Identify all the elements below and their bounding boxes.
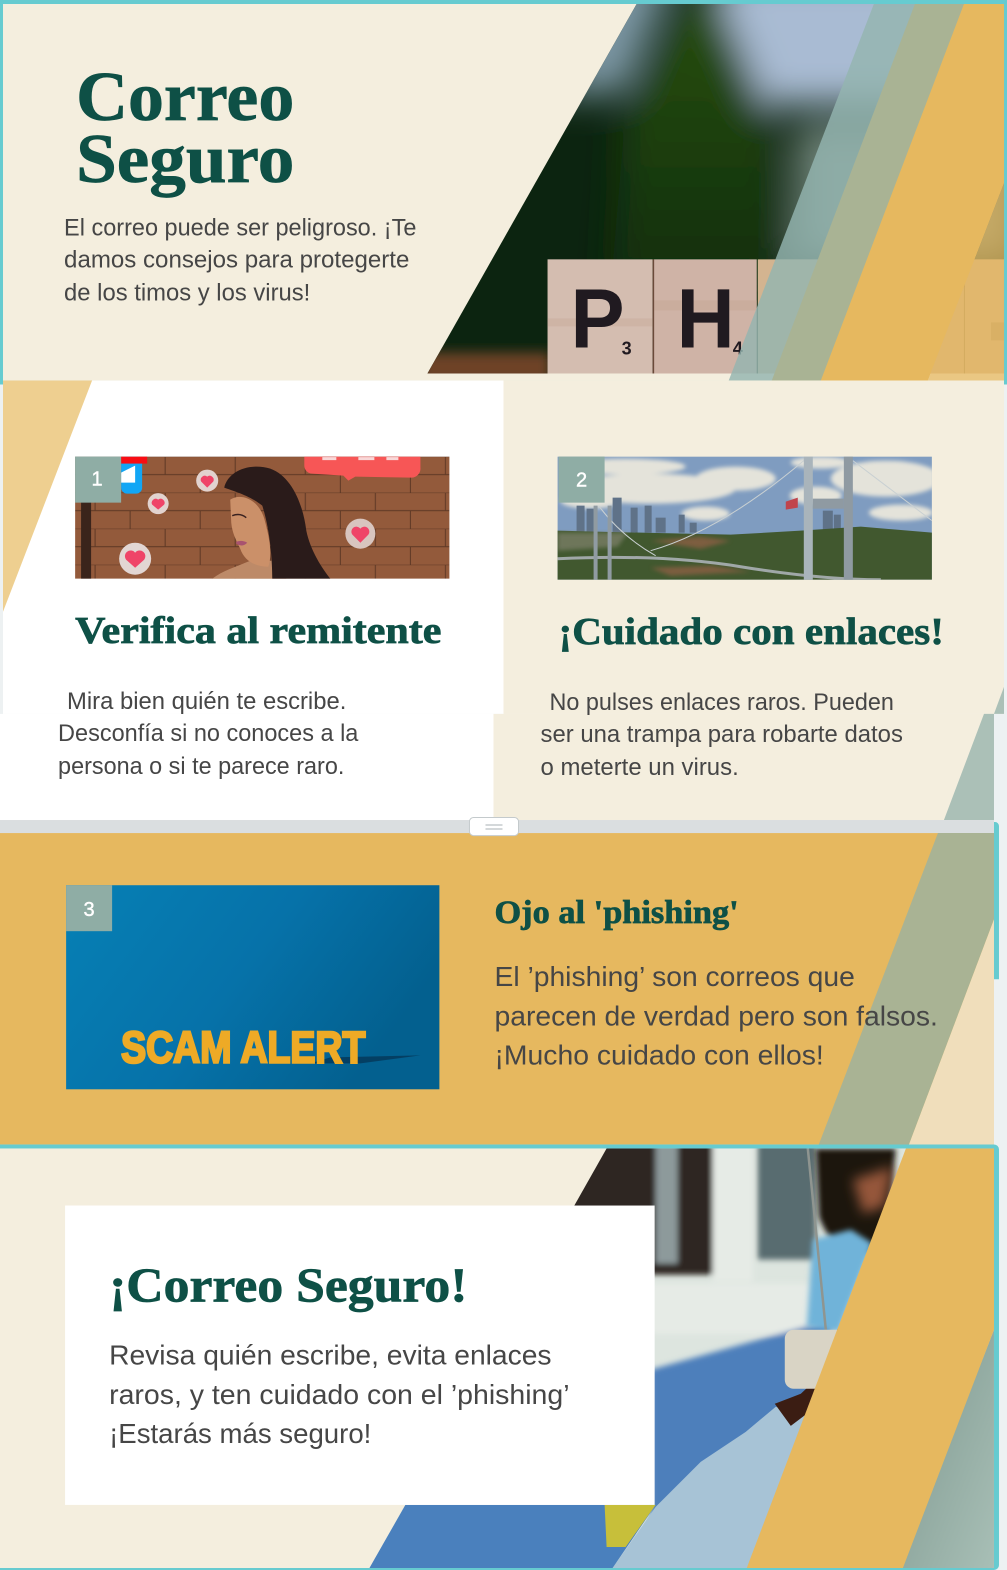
resize bar [0,820,994,833]
photo: woman on train [360,1131,1001,1569]
intro text: damos consejos para protegerte [64,246,409,273]
panel: tip 3 phishing [0,833,994,1144]
panel: header [0,0,1007,384]
body text [541,689,903,781]
body text: raros, y ten cuidado con el ’phishing’ [109,1379,570,1410]
number badge 2: 2 [576,470,587,492]
tile P: 3 [622,338,632,358]
teal side accent [994,822,999,979]
number badge 1 [75,457,121,503]
white text card [65,1206,655,1505]
body text: Desconfía si no conoces a la [58,720,359,747]
photo: scam alert [66,885,439,1089]
diagonal pale triangle [909,919,994,1144]
corner accent [944,687,1004,820]
heading: ¡Cuidado con enlaces! [559,611,944,653]
intro text [64,214,416,306]
body text [109,1340,570,1449]
body text: persona o si te parece raro. [58,753,344,780]
diagonal band: olive [772,4,965,380]
tile H: 4 [733,338,743,358]
number badge 2 [559,457,605,503]
heading: Verifica al remitente [75,610,441,652]
title: Correo [76,59,294,136]
number badge 1: 1 [92,469,103,491]
body text: No pulses enlaces raros. Pueden [550,689,894,716]
panel: conclusion [0,1131,1001,1570]
heading: ¡Correo Seguro! [109,1258,467,1313]
panel: tip 2 cuidado con enlaces [493,380,1004,820]
diagonal band: teal [729,4,916,380]
body text: El ’phishing’ son correos que [494,961,855,992]
diagonal band: gold [821,4,1004,380]
tile P: P [571,271,625,365]
diagonal gold band [747,1148,994,1568]
body text: o meterte un virus. [541,754,739,781]
photo: scam alert: SCAM ALERT [121,1023,365,1072]
body text [58,688,359,780]
body text [494,961,938,1070]
diagonal olive band [819,833,994,1144]
table edge [428,344,548,374]
intro text: El correo puede ser peligroso. ¡Te [64,214,416,241]
panel: tip 1 verifica al remitente [0,380,504,820]
heading: Ojo al 'phishing' [494,895,739,931]
number badge 3: 3 [84,899,95,921]
tile H: H [677,271,735,365]
body text: ¡Estarás más seguro! [109,1418,371,1449]
diagonal overlay: right gold tint [928,183,1004,380]
body text: Mira bien quién te escribe. [67,688,346,715]
number badge 3 [66,885,112,931]
body text: ¡Mucho cuidado con ellos! [494,1039,824,1070]
resize handle [469,818,519,836]
body text: Revisa quién escribe, evita enlaces [109,1340,552,1371]
tile H [654,259,757,375]
title [76,59,294,198]
tile P [548,259,653,375]
long hair [774,1329,838,1426]
woman head and shirt [807,1148,896,1332]
title: Seguro [76,121,294,198]
header photo: scrabble tiles [420,0,1007,382]
corner triangle [3,380,92,612]
photo: woman and hearts [75,457,449,579]
body text: ser una trampa para robarte datos [541,721,903,748]
photo: bridge [558,457,941,580]
body text: parecen de verdad pero son falsos. [494,1000,938,1031]
intro text: de los timos y los virus! [64,279,310,306]
